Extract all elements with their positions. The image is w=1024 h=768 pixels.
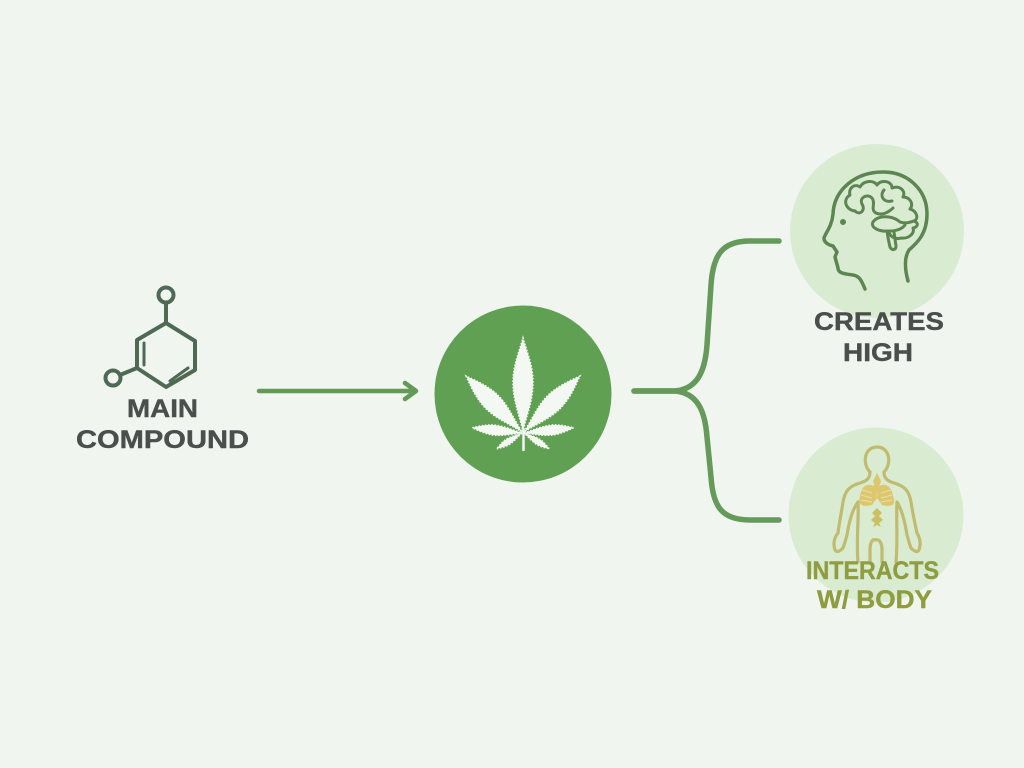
label: main compound: COMPOUND [76,426,249,454]
label: main compound: MAIN [127,395,198,423]
icon: molecule [106,288,195,387]
panel: interacts with body [788,428,964,614]
circle: interacts background [788,428,964,602]
icon: human body [834,447,920,562]
circle: creates high background [790,144,964,318]
label: interacts with body: W/ BODY [817,586,932,614]
icon: brain [846,181,917,250]
label: interacts with body [806,557,939,614]
label: creates high: CREATES [814,308,944,336]
connector: branching brace [634,241,779,520]
label: interacts with body: INTERACTS [806,557,939,585]
label: creates high: HIGH [843,339,913,367]
label: creates high [814,308,944,367]
arrow: compound to cannabis [259,383,416,399]
panel: creates high [790,144,964,367]
icon: cannabis leaf in circle [434,306,612,482]
label: main compound [76,395,249,454]
icon: lungs and spine [859,473,894,527]
icon: head with brain [824,172,927,289]
